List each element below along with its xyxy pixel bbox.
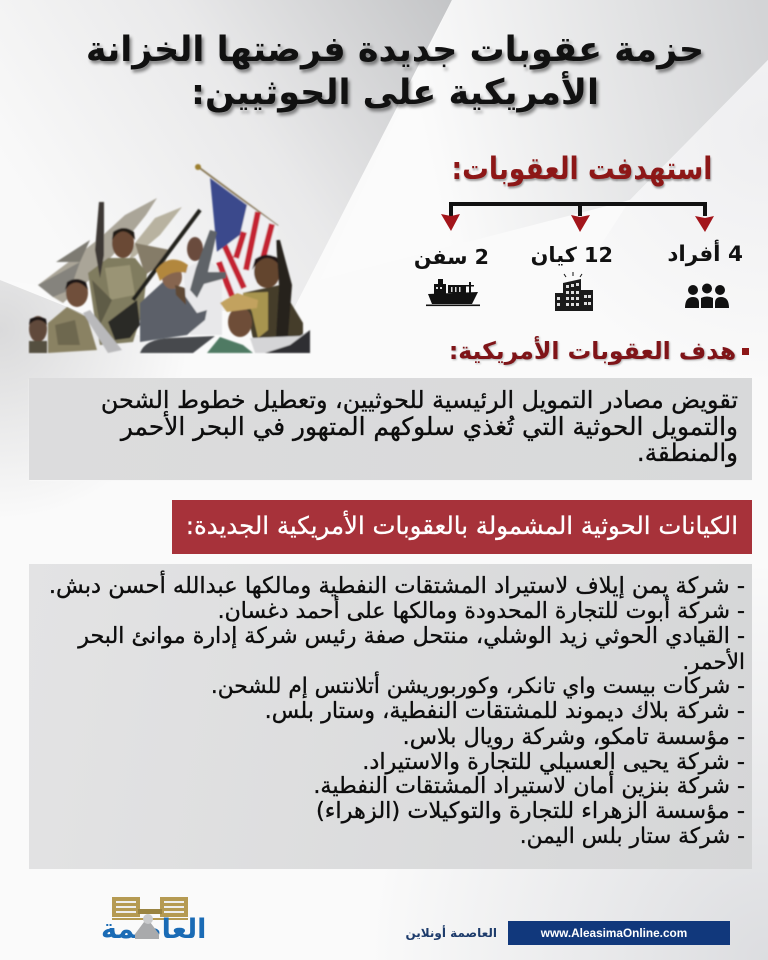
panel: list of entities: - القيادي الحوثي زيد الوشلي، منتحل صفة رئيس شركة إدارة موانئ البحر — [78, 623, 745, 649]
missiles — [38, 198, 182, 303]
panel: list of entities: - شركة أبوت للتجارة المحدودة ومالكها على أحمد دغسان. — [218, 599, 745, 624]
rifle — [190, 230, 226, 298]
label: Al-Asima Online: العاصمة أونلاين — [406, 926, 497, 940]
panel: list of entities: - شركة بنزين أمان لاستيراد المشتقات النفطية. — [313, 773, 745, 799]
banner: Houthi entities covered: الكيانات الحوثية المشمولة بالعقوبات الأمريكية الجديدة: — [186, 511, 738, 540]
foreground man in cap — [207, 337, 253, 353]
title: حزمة عقوبات جديدة فرضتها الخزانة — [86, 30, 704, 70]
website bar — [508, 921, 730, 945]
panel: goal description — [29, 378, 752, 480]
stat: 4 individuals — [667, 240, 743, 308]
tree connector with three red arrows — [441, 202, 714, 232]
front left fighter camo — [48, 307, 97, 353]
panel: list of entities — [29, 564, 752, 869]
panel: list of entities: - شركة يمن إيلاف لاستيراد المشتقات النفطية ومالكها عبدالله أحسن دبش. — [49, 573, 745, 599]
flag pole — [197, 166, 278, 226]
title — [86, 30, 705, 118]
panel: list of entities: - شركة بلاك ديموند للمشتقات النفطية، وستار بلس. — [265, 698, 745, 724]
panel: goal description: والمنطقة. — [637, 438, 738, 467]
website bar: www.AleasimaOnline.com — [541, 926, 687, 940]
far left man — [29, 316, 47, 342]
logo emblem — [112, 897, 188, 920]
vehicle — [140, 336, 215, 353]
right fighter — [243, 285, 303, 339]
photo: armed fighters with American flag — [28, 163, 312, 354]
logo wordmark: العاصمة — [101, 914, 206, 945]
heading: sanctions targeted: استهدفت العقوبات: — [451, 151, 712, 187]
heading: goal of American sanctions: هدف العقوبات الأمريكية: — [449, 337, 736, 365]
panel: goal description: والتمويل الحوثية التي تُغذي سلوكهم المتهور في البحر الأحمر — [121, 412, 738, 441]
center fighter grey jacket — [140, 282, 207, 342]
title: الأمريكية على الحوثيين: — [191, 73, 599, 113]
panel: list of entities: - شركة يحيى العسيلي للتجارة والاستيراد. — [362, 749, 745, 775]
icon: office building — [555, 272, 593, 311]
panel: list of entities: - مؤسسة تامكو، وشركة رويال بلاس. — [403, 724, 745, 750]
icon: cargo ship — [426, 279, 480, 306]
stat: 12 entities — [531, 243, 613, 311]
stat: 2 ships — [414, 245, 489, 306]
panel: list of entities: - شركات بيست واي تانكر، وكوربوريشن أتلانتس إم للشحن. — [211, 674, 745, 699]
panel: goal description: تقويض مصادر التمويل الرئيسية للحوثيين، وتعطيل خطوط الشحن — [101, 386, 738, 414]
stat: 12 entities: 12 كيان — [531, 243, 613, 267]
logo grey house mark — [135, 914, 159, 939]
long gun — [133, 210, 200, 300]
American flag — [210, 178, 278, 298]
icon: people — [685, 284, 729, 308]
standing fighter camo — [88, 258, 147, 345]
panel: list of entities: - شركة ستار بلس اليمن. — [520, 824, 745, 849]
panel: list of entities: - مؤسسة الزهراء للتجارة والتوكيلات (الزهراء) — [316, 798, 745, 824]
stat: 2 ships: 2 سفن — [414, 245, 489, 269]
stat: 4 individuals: 4 أفراد — [667, 242, 743, 267]
logo: Al-Asima — [101, 897, 206, 945]
panel: list of entities: الأحمر. — [682, 650, 745, 675]
background figure — [183, 258, 222, 335]
banner: Houthi entities covered — [172, 500, 752, 554]
bullet square — [742, 348, 749, 355]
